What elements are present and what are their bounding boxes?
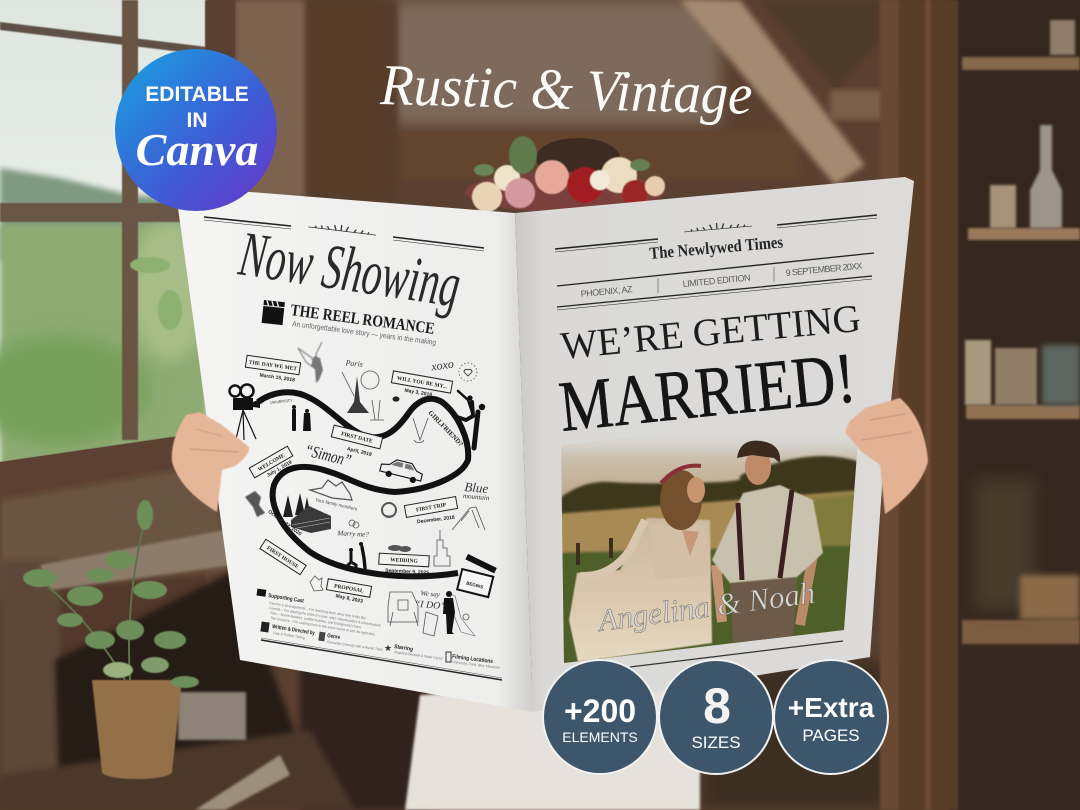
footer credits (256, 589, 500, 670)
icon: bird sketch (245, 491, 265, 517)
badge text: in: IN (186, 109, 208, 132)
icon: proposal silhouette (347, 542, 365, 568)
location: PHOENIX, AZ (580, 284, 633, 299)
dateline separators (658, 267, 774, 293)
photo: couple in a field (561, 440, 858, 663)
label: your family members: Your family members (315, 497, 358, 512)
pages: PAGES (802, 726, 860, 745)
date: 9 SEPTEMBER 20XX (785, 261, 863, 278)
ribbon: the day we met: THE DAY WE MET (248, 360, 298, 372)
ribbon: first house: FIRST HOUSE (265, 545, 300, 571)
label: Blue mountain: mountain (463, 492, 490, 502)
title: Rustic & Vintage: Rustic & Vintage (379, 52, 753, 127)
written credit: Fate & Perfect Timing (273, 631, 305, 640)
ribbon: proposal: PROPOSAL (334, 583, 364, 595)
supporting cast heading: Supporting Cast (268, 593, 304, 605)
figure: bride (569, 466, 712, 662)
date: March 15: March 15, 2018 (259, 373, 295, 383)
label: marry me: Marry me? (336, 529, 369, 539)
label: Blue mountain (463, 479, 490, 502)
heading: Now Showing: Now Showing (234, 218, 465, 321)
icon: walking couple silhouettes (292, 405, 311, 431)
timeline road (258, 392, 468, 576)
footer rule (261, 638, 502, 680)
icon: popcorn (318, 632, 326, 641)
person: dress skirt (405, 680, 700, 810)
ribbon: wedding (379, 553, 429, 567)
icon: potted plant (23, 257, 199, 779)
supporting cast lines: Pets – Scene stealers, cuddle buddies, and background chaos (270, 611, 362, 629)
icon: globe sketch (382, 503, 396, 517)
headline line one: WE’RE GETTING (559, 297, 863, 368)
label: girlfriend: GIRLFRIEND? (427, 410, 464, 448)
icon: scroll and rings (423, 612, 469, 636)
date: October 22: October 22, 2020 (267, 509, 303, 538)
ribbon: first date (331, 425, 383, 449)
icon: bride and groom (443, 591, 475, 636)
names on photo: Angelina & Noah (594, 575, 817, 638)
ribbon: will you be my (391, 371, 453, 393)
icon: cupid angels (298, 342, 323, 383)
icon: wedding cake (434, 530, 450, 566)
filming credit: University, Paris, Blue Mountain (452, 660, 500, 670)
newspaper: left page (175, 186, 533, 712)
label: We say I do: “I DO” (414, 599, 447, 612)
icon: flowers sketch (388, 545, 411, 552)
icon: mountain sketch (452, 507, 485, 530)
icon: jumping couple silhouette (454, 391, 485, 448)
8: 8 (703, 678, 731, 734)
icon: cabin and pines (283, 493, 331, 533)
sizes: SIZES (691, 733, 741, 752)
badge: +Extra pages (774, 660, 888, 774)
ribbon: first trip: FIRST TRIP (416, 502, 447, 514)
icon: lips and hands (392, 396, 428, 443)
ribbon: first house (260, 539, 306, 575)
icon: laurel ornament (308, 221, 376, 235)
label: We say I do: We say (420, 589, 441, 599)
label: Blue mountain: Blue (464, 479, 489, 496)
label: Paris: Paris (344, 358, 363, 369)
newspaper: right page (515, 177, 914, 712)
label: XOXO: xoxo (429, 357, 455, 374)
masthead: The Newlywed Times: The Newlywed Times (649, 232, 784, 263)
label: Simon: “Simon” (303, 440, 353, 470)
genre heading: Genre (327, 633, 340, 641)
ribbon: the day we met (245, 355, 301, 375)
supporting cast lines: Parents & Grandparents – For teaching them what love looks like (269, 601, 366, 620)
date: April: April, 2018 (346, 446, 372, 458)
badge: editable in Canva (115, 49, 277, 211)
badge text: canva: Canva (136, 124, 258, 175)
icon: champagne glasses and sketches (342, 371, 384, 420)
icon: film camera on tripod (230, 384, 260, 440)
supporting cast lines: The Universe – For casting them in the same scene at just the right time (270, 616, 375, 637)
badge: +200 elements (543, 660, 657, 774)
background: left wall and table with plant (0, 465, 355, 810)
badge: 8 sizes (659, 660, 773, 774)
ribbon: will you be my: WILL YOU BE MY... (396, 376, 448, 390)
date: May 8: May 8, 2023 (335, 593, 364, 605)
date: May 3: May 3, 2018 (404, 388, 433, 398)
date: December: December, 2018 (417, 515, 455, 525)
icon: clapperboard (262, 300, 285, 325)
masthead rules (555, 215, 877, 252)
+200: +200 (564, 693, 636, 729)
icon: film clapper The End (457, 554, 498, 597)
genre credit: Romantic Comedy with a Rustic Twist (327, 640, 383, 652)
icon: small camera (256, 589, 266, 597)
hand: right (845, 398, 928, 514)
background: window with landscape (0, 0, 235, 500)
ribbon: welcome (249, 446, 293, 478)
starring heading: Starring (394, 644, 414, 653)
icon: rings (349, 520, 359, 528)
person: hair and floral crown (465, 136, 665, 212)
+Extra: +Extra (788, 692, 875, 723)
top rules (204, 217, 484, 251)
filming locations heading: Filming Locations (452, 654, 493, 665)
icon: star: ★ (384, 643, 392, 653)
icon: Eiffel tower (347, 376, 369, 413)
ribbon: wedding: WEDDING (390, 557, 419, 565)
date: September 9: September 9, 2025 (385, 568, 429, 576)
icon: film clapper The End: BEGINS (466, 581, 484, 590)
tagline: An unforgettable love story — years in the making (292, 319, 437, 347)
hand: left (172, 412, 249, 512)
ribbon: first date: FIRST DATE (340, 431, 373, 445)
ribbon: welcome: WELCOME (257, 453, 286, 473)
dateline rules (557, 253, 874, 310)
supporting cast lines (269, 601, 381, 637)
icon: wedding car (388, 592, 418, 626)
subheading: The Reel Romance: THE REEL ROMANCE (289, 300, 436, 338)
badge text: editable: EDITABLE (145, 83, 249, 106)
figure: groom (712, 441, 823, 642)
ribbon: first trip (404, 497, 458, 517)
ribbon: proposal (326, 579, 372, 597)
icon: heart in dotted ring (459, 363, 477, 381)
rule below photo (630, 641, 843, 667)
supporting cast lines: Friends – For playing the roles of comic relief, cheerleaders & cheerleaders (269, 606, 381, 628)
icon: director chair (260, 621, 270, 633)
icon: family members sketch (310, 480, 352, 500)
background: right shelves (880, 0, 1080, 810)
elements: ELEMENTS (562, 729, 638, 745)
label: We say I do (414, 589, 447, 612)
edition: LIMITED EDITION (682, 273, 751, 289)
icon: vintage car (379, 456, 424, 485)
icon: flying birds (310, 576, 323, 591)
icon: film strip (446, 652, 451, 662)
written and directed heading: Written & Directed by (272, 624, 316, 637)
icon: laurel ornament (684, 220, 752, 232)
date: July 1: July 1, 2019 (266, 459, 293, 479)
starring credit: Angelina Bennett & Noah Carter (394, 650, 444, 661)
dateline (580, 261, 863, 299)
headline line two: MARRIED! (556, 337, 859, 447)
label: university: UNIVERSITY (270, 399, 293, 405)
